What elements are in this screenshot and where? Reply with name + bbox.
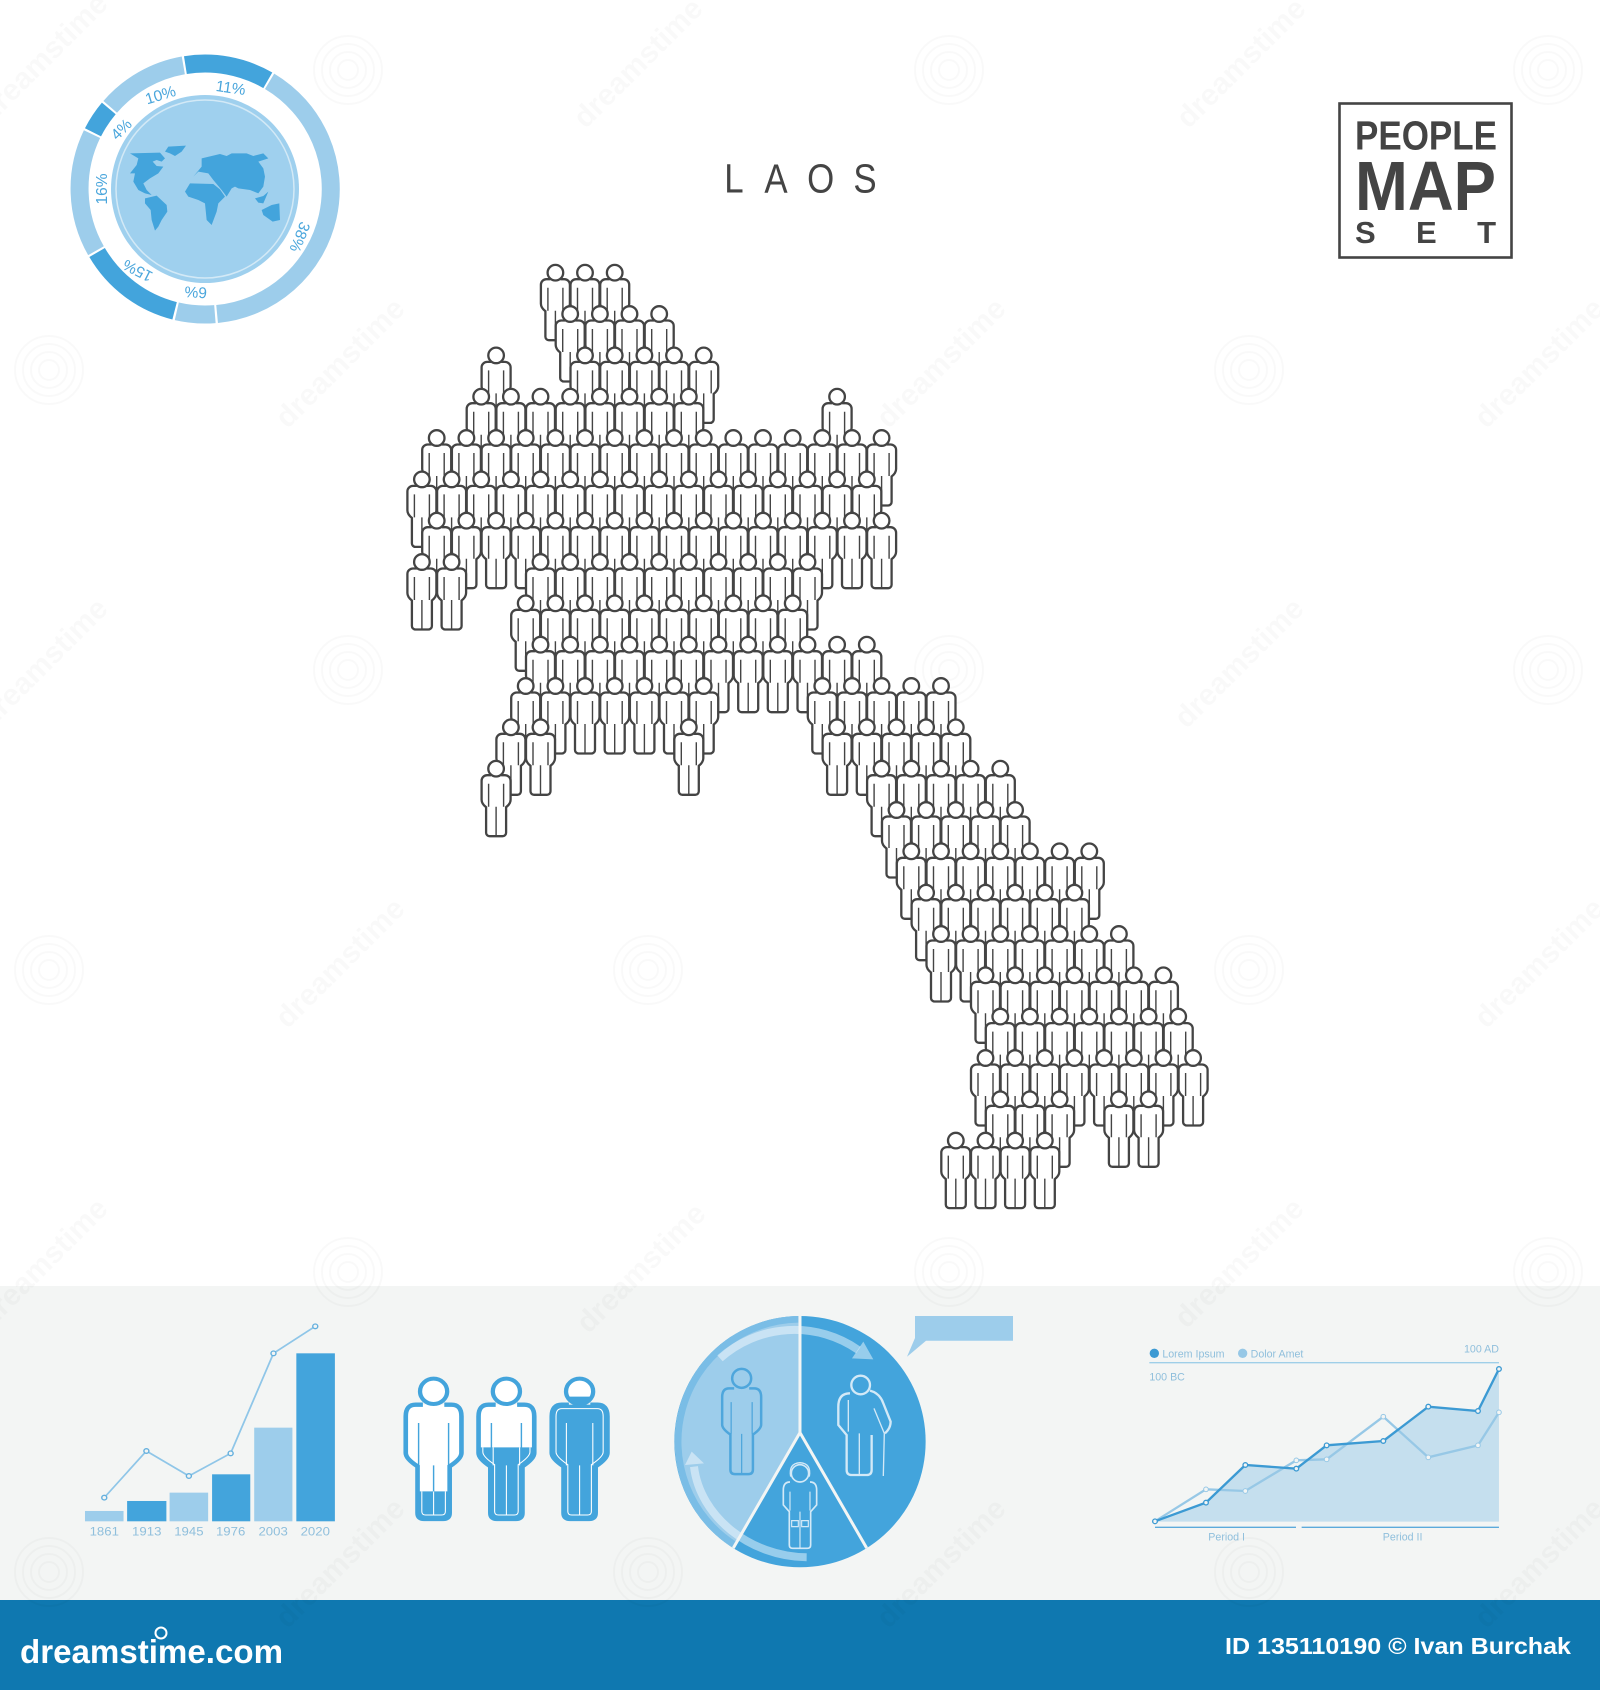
callout <box>907 1316 1013 1357</box>
icon: world map <box>130 146 280 231</box>
watermark text: dreamstime <box>870 1492 1012 1634</box>
badge: people map set: SET <box>1355 215 1496 250</box>
bar chart with line: 2003 <box>258 1524 288 1538</box>
donut percent labels: 10% <box>143 83 178 108</box>
bottom light band <box>0 1286 1600 1600</box>
legend: Lorem Ipsum <box>1162 1349 1225 1361</box>
footer bar <box>0 1600 1600 1690</box>
icon: person filled high <box>552 1379 607 1519</box>
badge: people map set <box>1340 104 1512 258</box>
watermark text: dreamstime <box>269 892 411 1034</box>
bar chart with line <box>85 1324 335 1538</box>
axis labels <box>1149 1343 1499 1383</box>
footer logo: dreamstime.com <box>20 1633 283 1670</box>
badge: people map set: PEOPLE <box>1355 112 1497 158</box>
donut percent labels: 4% <box>108 116 136 144</box>
icon: person filled low <box>406 1379 461 1519</box>
watermark text: dreamstime <box>1168 592 1310 734</box>
bar chart with line: 1976 <box>216 1524 245 1538</box>
axis labels: 100 BC <box>1149 1371 1185 1383</box>
donut percent labels <box>94 78 313 301</box>
donut percent labels: 15% <box>120 255 156 285</box>
donut percent labels: 38% <box>285 219 313 254</box>
bar chart with line: 1861 <box>90 1524 119 1538</box>
map: Laos made of people icons <box>407 265 1208 1208</box>
footer credit: ID 135110190 © Ivan Burchak <box>1225 1633 1572 1659</box>
watermark text: dreamstime <box>570 1197 712 1339</box>
line chart: Period I <box>1208 1531 1245 1543</box>
donut percent labels: 16% <box>94 173 111 205</box>
icon: elderly with cane <box>838 1376 891 1476</box>
donut chart with world map <box>80 64 331 314</box>
legend <box>1150 1349 1303 1361</box>
title: LAOS <box>724 157 877 202</box>
arrow: bottom left <box>685 1452 807 1557</box>
watermark text: dreamstime <box>870 292 1012 434</box>
bar chart with line: 2020 <box>301 1524 330 1538</box>
donut percent labels: 11% <box>215 78 247 99</box>
badge: people map set: MAP <box>1355 147 1496 225</box>
donut percent labels: 6% <box>184 282 207 301</box>
icon: person filled half <box>479 1379 534 1519</box>
pie chart with age groups <box>674 1316 926 1567</box>
line chart <box>1149 1343 1501 1543</box>
icon: child <box>783 1463 817 1548</box>
axis labels: 100 AD <box>1464 1343 1499 1355</box>
bar chart with line: 1945 <box>174 1524 204 1538</box>
line chart: Period II <box>1383 1531 1422 1543</box>
legend: Dolor Amet <box>1251 1349 1303 1361</box>
watermark text: dreamstime <box>269 1492 411 1634</box>
arrow: top clockwise <box>720 1330 873 1359</box>
watermark text: dreamstime <box>269 292 411 434</box>
watermark text: dreamstime <box>1168 1192 1310 1334</box>
bar chart with line: 1913 <box>132 1524 161 1538</box>
icon: adult <box>722 1369 761 1474</box>
